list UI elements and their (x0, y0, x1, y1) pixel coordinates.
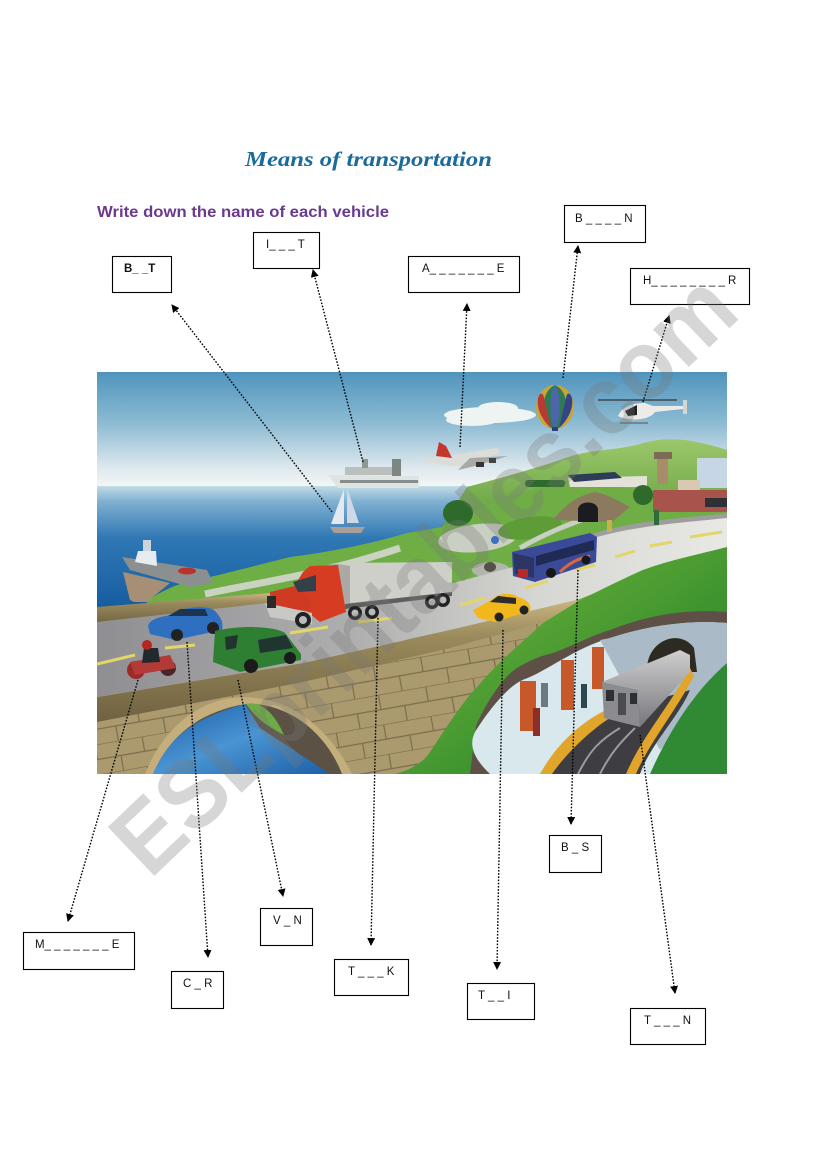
passengers on platform (533, 683, 587, 736)
subway cutaway (470, 611, 727, 774)
answer box: boat (112, 256, 172, 292)
bridge parapet (97, 600, 580, 722)
platform pillars (520, 647, 604, 731)
cloud (444, 402, 536, 426)
side road (592, 513, 727, 537)
watermark: ESLprintables.com (89, 251, 757, 895)
arrow: van (238, 680, 283, 896)
sea (97, 486, 470, 607)
helicopter (598, 400, 687, 423)
airplane (415, 442, 508, 470)
winding paths (204, 516, 583, 598)
blue car (148, 607, 223, 641)
transportation scene illustration (97, 372, 727, 774)
trees (443, 480, 653, 526)
answer box: taxi: T _ _ I (478, 990, 510, 1002)
answer box: train: T _ _ _ N (644, 1015, 691, 1027)
subway train (602, 650, 690, 727)
tunnel in hillside (553, 492, 630, 522)
arrow: motorcycle (68, 680, 138, 921)
yellow taxi (473, 594, 530, 622)
highway (97, 518, 727, 697)
arrow: airplane (460, 304, 467, 447)
answer box: balloon (564, 206, 646, 242)
arrow: bus (571, 570, 578, 824)
arrow: boat (172, 305, 332, 512)
solar building (568, 472, 647, 487)
arrow: truck (371, 618, 378, 945)
answer box: motorcycle (24, 932, 134, 970)
answer box: motorcycle: M_ _ _ _ _ _ _ E (35, 939, 120, 951)
answer box: car (172, 972, 224, 1008)
distant green hills (440, 439, 727, 530)
green bank beside track (650, 663, 727, 774)
answer box: airplane (408, 256, 520, 292)
answer box: helicopter: H_ _ _ _ _ _ _ _ R (643, 275, 736, 287)
green van (213, 627, 301, 673)
ferry and pier (122, 540, 213, 602)
answer box: liner: I_ _ _ T (266, 239, 305, 251)
answer box: bus: B _ S (561, 842, 589, 854)
arrow: helicopter (643, 316, 669, 402)
subway tracks (540, 668, 694, 774)
worksheet page (22, 152, 750, 1046)
answer box: car: C _ R (183, 978, 212, 990)
answer box: van: V _ N (273, 915, 302, 927)
answer box: truck: T _ _ _ K (348, 966, 395, 978)
road centre line (97, 532, 722, 664)
answer box: helicopter (630, 268, 750, 304)
blue bus (512, 533, 597, 582)
arch and river (145, 697, 352, 774)
back wall of bridge (97, 593, 270, 625)
hot air balloon (536, 385, 574, 431)
coastal land (147, 480, 727, 640)
arrow: balloon (563, 246, 578, 378)
arrow: car (187, 642, 208, 957)
answer box: balloon: B _ _ _ _ N (575, 213, 633, 225)
arrow: train (640, 735, 675, 993)
answer box: airplane: A_ _ _ _ _ _ _ E (422, 263, 505, 275)
instruction heading: Write down the name of each vehicle (97, 204, 389, 221)
ocean liner (328, 459, 419, 488)
green hillside foreground (395, 547, 727, 774)
answer box: boat: B_ _T (124, 263, 155, 275)
answer box: bus (550, 836, 602, 872)
bridge brickwork (97, 622, 546, 774)
answer box: taxi (468, 984, 534, 1020)
answer box: liner (254, 232, 320, 268)
answer box: truck (334, 960, 408, 996)
motorcycle with rider (127, 640, 176, 679)
arrow: liner (313, 270, 363, 462)
control tower (654, 452, 672, 484)
arrow: taxi (497, 630, 503, 969)
answer box: train (630, 1008, 706, 1044)
sailboat (330, 488, 365, 533)
brick building (653, 480, 727, 512)
title: Means of transportation (244, 147, 492, 171)
red semi truck (265, 562, 452, 628)
office building (697, 458, 727, 488)
answer box: van (260, 908, 312, 946)
cyclist and pedestrian (607, 510, 659, 532)
bus stop (484, 536, 499, 572)
sky (97, 372, 727, 486)
